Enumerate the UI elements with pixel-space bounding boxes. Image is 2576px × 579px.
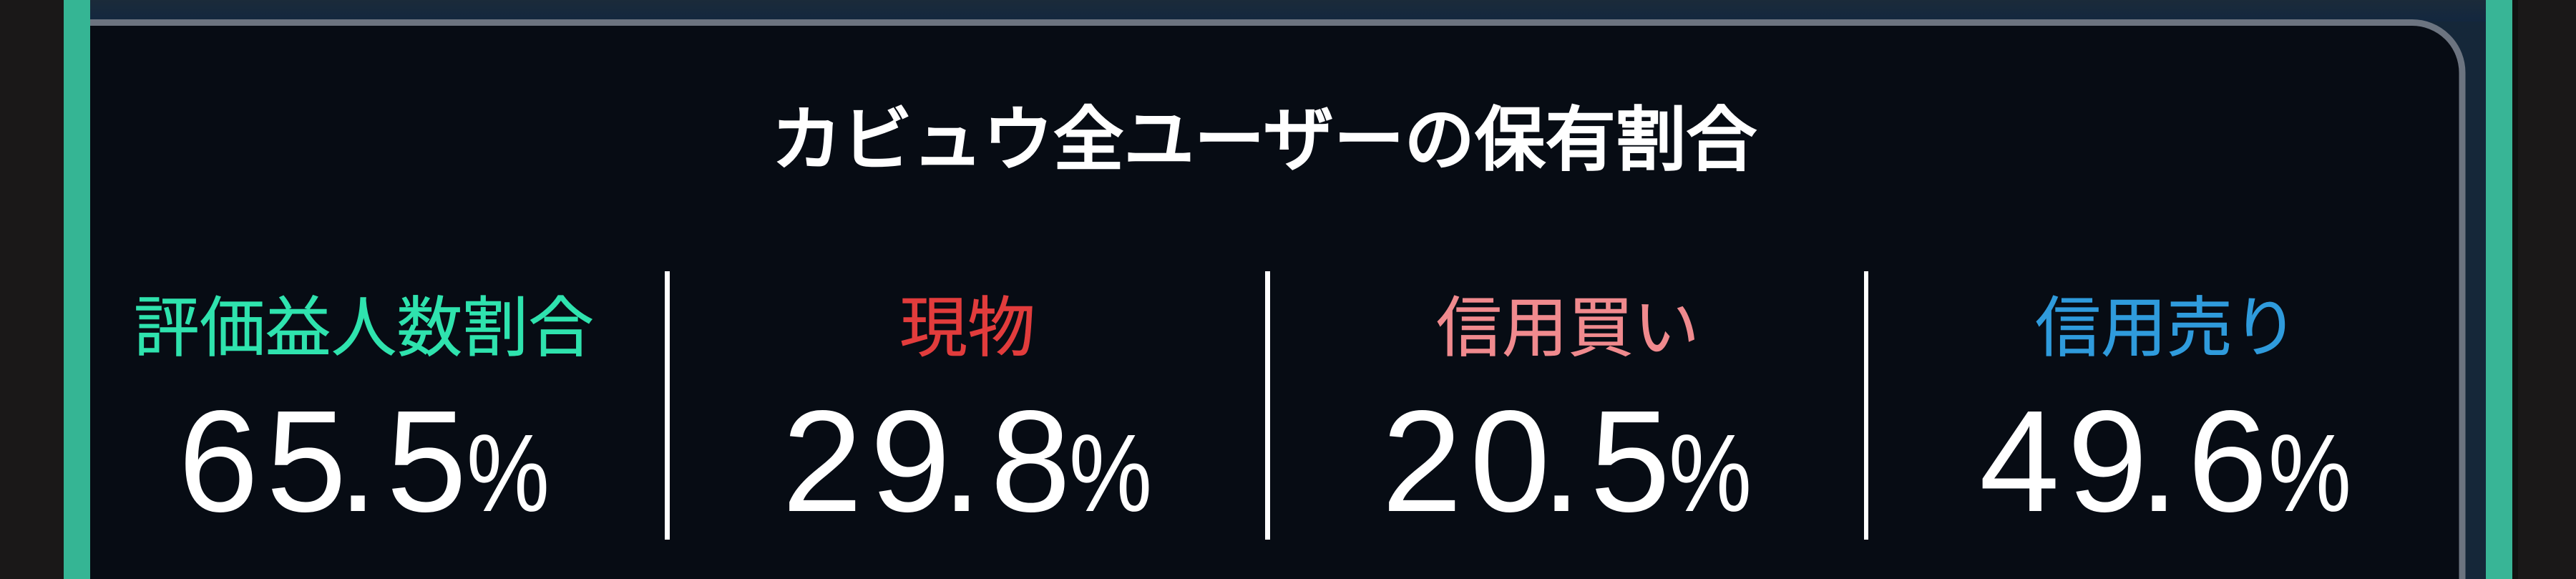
right dark edge strip <box>2512 0 2518 579</box>
divider 1 <box>665 271 670 540</box>
value: 49.6 <box>1979 380 2268 542</box>
stat: margin buy <box>1382 292 1752 542</box>
value: 20.5 <box>1382 380 1670 542</box>
label: 現物 <box>899 292 1035 365</box>
value: 29.8 <box>782 380 1070 542</box>
stat: cash holdings <box>782 292 1152 542</box>
label: 信用買い <box>1436 292 1699 365</box>
divider 3 <box>1864 271 1868 540</box>
heading: カビュウ全ユーザーの保有割合 <box>771 100 1757 179</box>
navy top band <box>90 0 2486 21</box>
value: 65.5 <box>178 380 467 542</box>
label: 信用売り <box>2035 292 2298 365</box>
stat: margin sell <box>1979 292 2351 542</box>
stat: unrealized profit share <box>134 292 594 542</box>
label: 評価益人数割合 <box>134 292 594 365</box>
value: % <box>1669 412 1752 535</box>
right green edge bar <box>2486 0 2512 579</box>
left green edge bar <box>64 0 90 579</box>
value: % <box>1069 412 1152 535</box>
value: % <box>467 412 550 535</box>
value: % <box>2268 412 2351 535</box>
divider 2 <box>1265 271 1270 540</box>
